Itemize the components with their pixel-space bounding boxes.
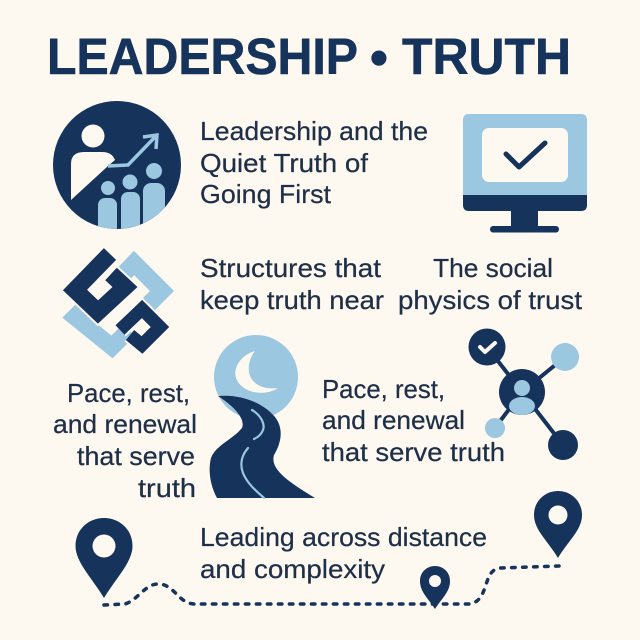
text: leading across distance: [200, 522, 487, 584]
title: TRUTH: [402, 28, 571, 85]
infographic canvas: [50, 38, 587, 609]
text: social physics: physics of trust: [398, 285, 583, 315]
icon: interlocking chain links: [75, 254, 162, 347]
icon: large map pin: [76, 518, 132, 598]
title: [47, 28, 571, 86]
text: pace middle: [322, 374, 505, 467]
icon: trust network: [468, 328, 579, 460]
text: pace left: truth: [138, 473, 196, 503]
text: pace middle: that serve truth: [322, 437, 505, 467]
text: leadership heading: Leadership and the: [200, 116, 428, 146]
text: structures: [200, 253, 384, 315]
text: leadership heading: [200, 116, 428, 209]
text: pace left: [53, 378, 197, 503]
text: social physics: [398, 253, 583, 315]
title: •: [370, 29, 388, 86]
text: leadership heading: Going First: [200, 179, 332, 209]
text: pace left: that serve: [77, 441, 195, 471]
text: leading across distance: and complexity: [200, 554, 385, 584]
icon: leader with growth arrow and team: [53, 101, 181, 238]
text: leadership heading: Quiet Truth of: [200, 148, 369, 178]
text: pace left: and renewal: [53, 409, 197, 439]
icon: moon and winding road: [210, 335, 315, 498]
icon: small map pin: [420, 566, 450, 609]
dotted route: [104, 566, 559, 605]
icon: monitor with check: [463, 114, 587, 232]
text: pace middle: and renewal: [322, 405, 465, 435]
icon: right map pin: [534, 491, 582, 558]
text: pace middle: Pace, rest,: [322, 374, 445, 404]
text: pace left: Pace, rest,: [67, 378, 190, 408]
title: LEADERSHIP: [47, 28, 358, 85]
text: leading across distance: Leading across distance: [200, 522, 487, 552]
text: social physics: The social: [433, 253, 553, 283]
text: structures: Structures that: [200, 253, 382, 283]
text: structures: keep truth near: [200, 285, 384, 315]
